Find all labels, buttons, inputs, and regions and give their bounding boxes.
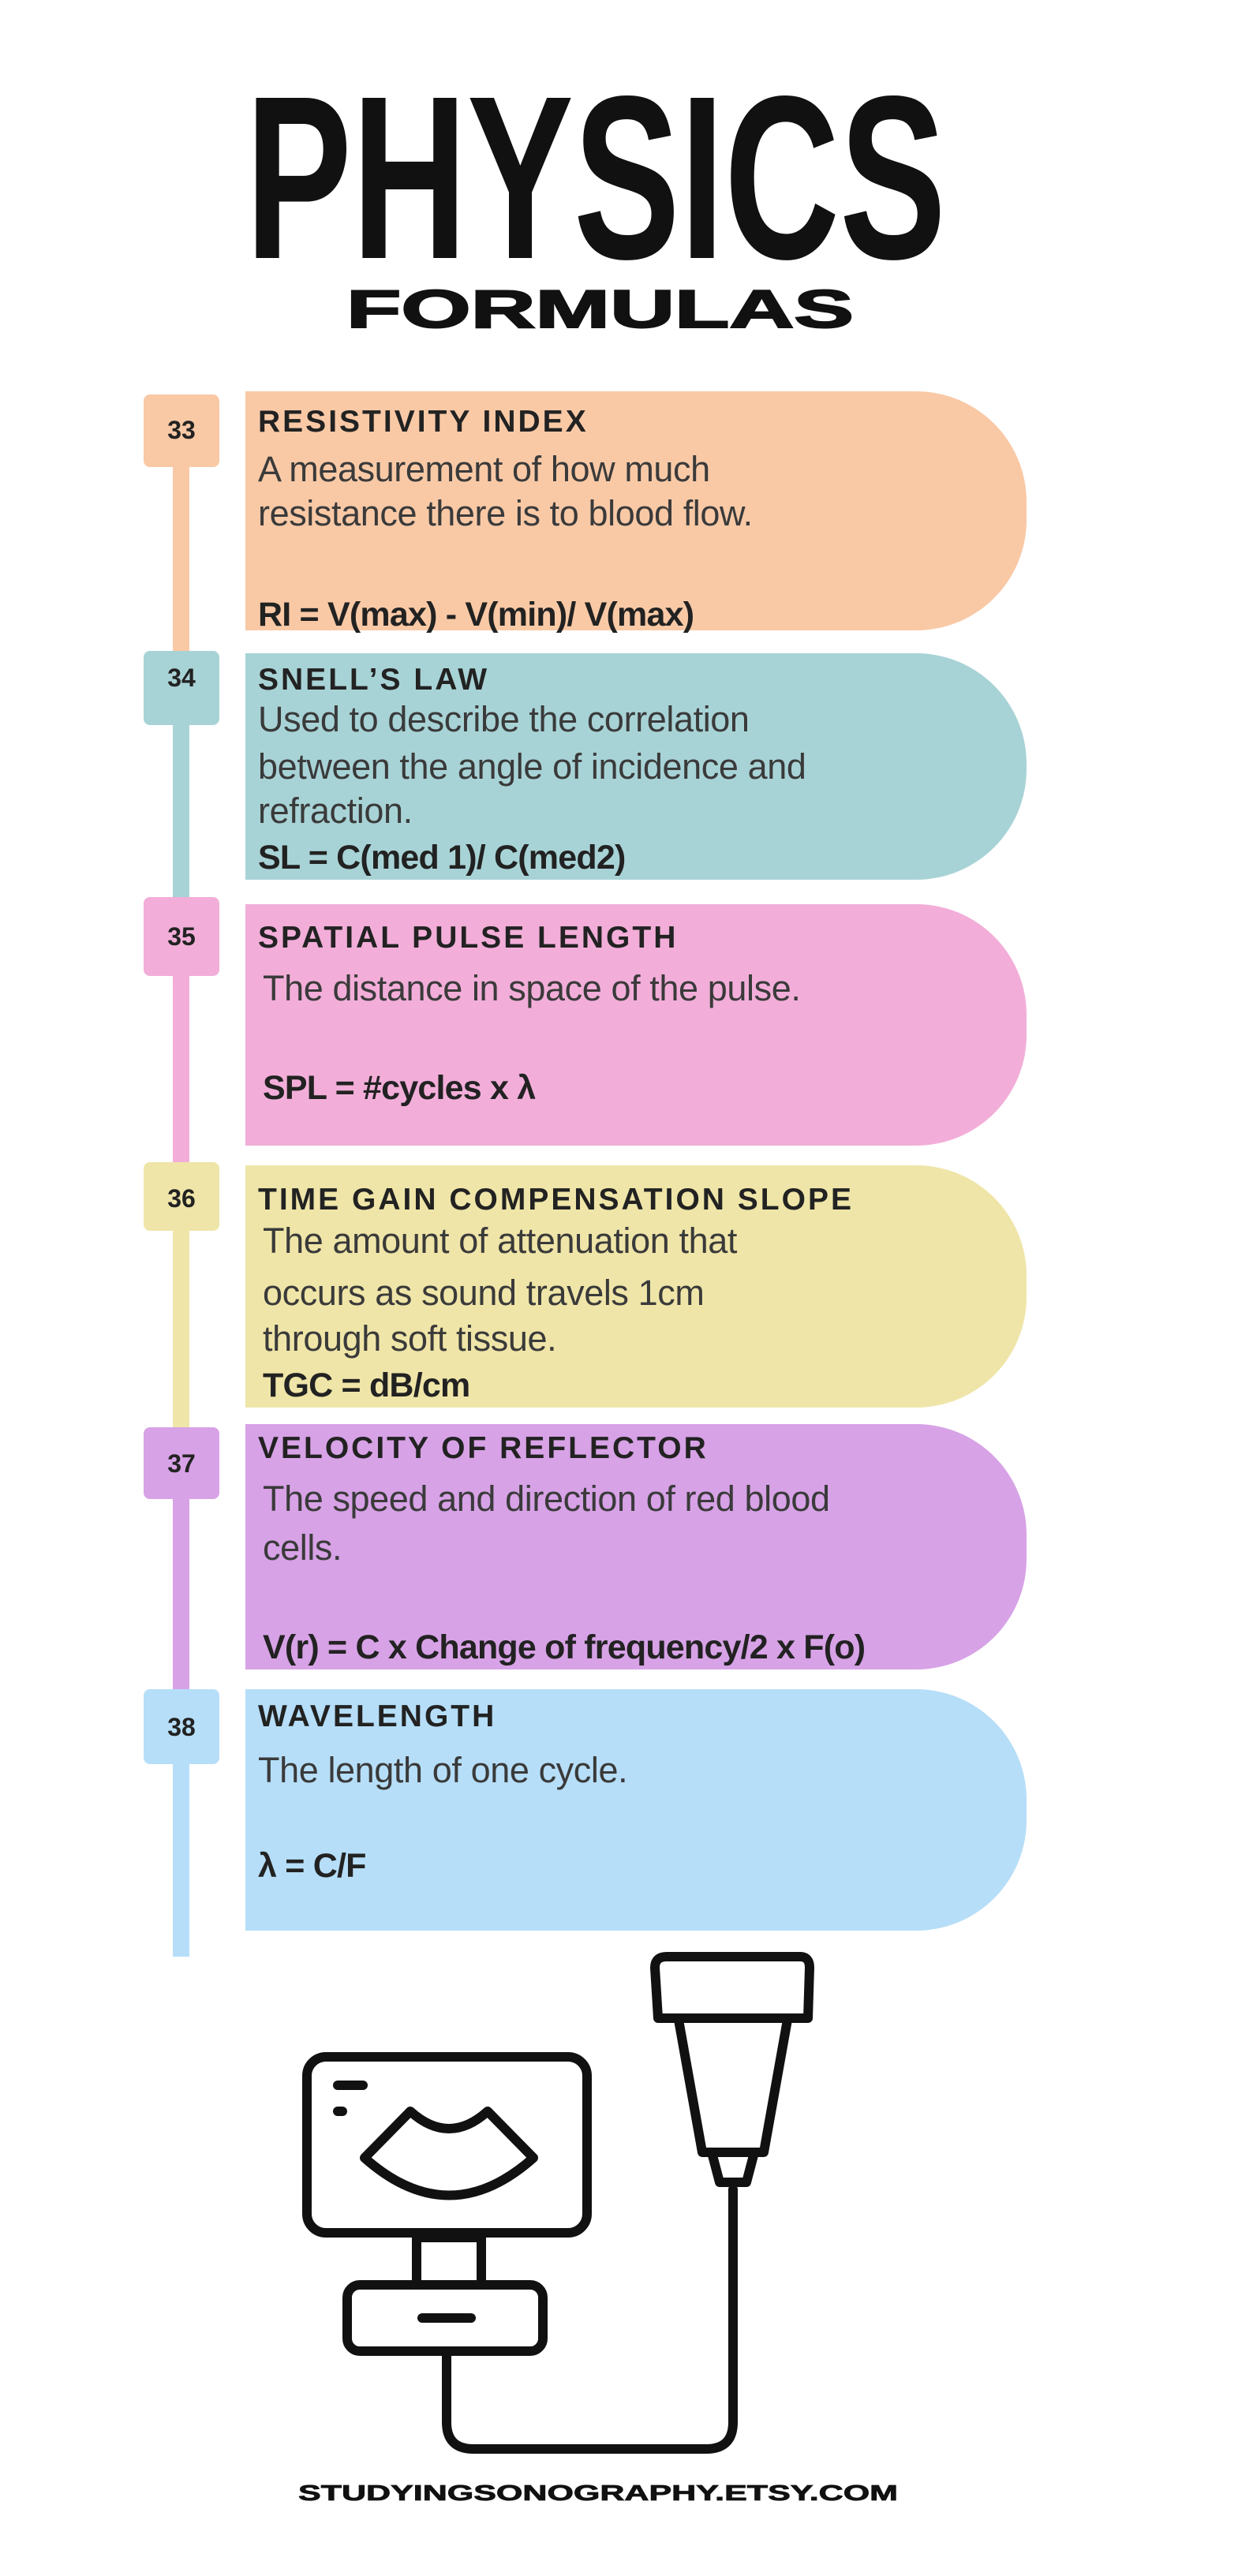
panel: 33 resistivity index: resistance there is to blood flow. — [258, 493, 753, 533]
panel: 34 snell's law: between the angle of incidence and — [258, 746, 806, 787]
number badge 37: 37 — [167, 1449, 196, 1478]
panel: 35 spatial pulse length: SPATIAL PULSE LENGTH — [258, 921, 678, 955]
panel: 33 resistivity index: RI = V(max) - V(min)/ V(max) — [258, 596, 694, 634]
base — [347, 2285, 543, 2351]
panel: 38 wavelength: The length of one cycle. — [258, 1750, 627, 1790]
panel: 33 resistivity index — [144, 391, 1027, 651]
panel: 36 time gain compensation slope: occurs as sound travels 1cm — [263, 1273, 704, 1313]
panel: 36 time gain compensation slope: TIME GAIN COMPENSATION SLOPE — [258, 1183, 854, 1217]
panel: 34 snell's law: SL = C(med 1)/ C(med2) — [258, 839, 625, 877]
number badge 35 — [144, 897, 219, 976]
panel: 36 time gain compensation slope — [144, 1162, 1027, 1427]
number badge 33: 33 — [167, 416, 196, 444]
ultrasound fan image — [365, 2111, 533, 2195]
number badge 34 — [144, 651, 219, 725]
panel: 33 resistivity index: RESISTIVITY INDEX — [258, 405, 589, 439]
panel: 35 spatial pulse length: SPL = #cycles x λ — [263, 1069, 536, 1107]
panel: 38 wavelength: λ = C/F — [258, 1847, 366, 1885]
number badge 33 — [144, 394, 219, 467]
cable — [447, 2189, 733, 2449]
panel: 33 resistivity index: A measurement of how much — [258, 449, 710, 489]
panel: 35 spatial pulse length — [144, 897, 1027, 1162]
panel: 34 snell's law: refraction. — [258, 791, 413, 831]
panel: 34 snell's law: Used to describe the correlation — [258, 699, 750, 739]
panel: 36 time gain compensation slope: The amount of attenuation that — [263, 1221, 738, 1261]
panel: 37 velocity of reflector: VELOCITY OF REFLECTOR — [258, 1431, 709, 1465]
footer url: STUDYINGSONOGRAPHY.ETSY.COM — [298, 2481, 898, 2505]
number badge 36 — [144, 1162, 219, 1231]
number badge 36: 36 — [167, 1184, 196, 1213]
panel: 37 velocity of reflector: cells. — [263, 1527, 342, 1568]
probe handle — [679, 2020, 787, 2152]
number badge 37 — [144, 1427, 219, 1499]
panel: 38 wavelength — [144, 1689, 1027, 1957]
panel: 37 velocity of reflector — [144, 1424, 1027, 1689]
panel: 36 time gain compensation slope: TGC = dB/cm — [263, 1367, 469, 1404]
panel: 34 snell's law — [144, 651, 1027, 897]
probe head — [655, 1957, 810, 2018]
panel: 34 snell's law: SNELL’S LAW — [258, 663, 489, 697]
stand — [417, 2238, 481, 2285]
number badge 38 — [144, 1689, 219, 1764]
panel: 36 time gain compensation slope: through soft tissue. — [263, 1318, 556, 1359]
monitor — [307, 2057, 587, 2233]
panel: 37 velocity of reflector: V(r) = C x Change of frequency/2 x F(o) — [263, 1628, 865, 1666]
number badge 35: 35 — [167, 922, 196, 951]
panel: 37 velocity of reflector: The speed and direction of red blood — [263, 1479, 830, 1519]
probe tip — [712, 2152, 754, 2182]
icon: ultrasound machine — [307, 1957, 810, 2449]
title: PHYSICS — [245, 47, 946, 308]
panel: 35 spatial pulse length: The distance in space of the pulse. — [263, 968, 800, 1008]
subtitle: FORMULAS — [346, 279, 854, 339]
number badge 38: 38 — [167, 1713, 196, 1741]
number badge 34: 34 — [167, 664, 196, 692]
panel: 38 wavelength: WAVELENGTH — [258, 1699, 496, 1733]
